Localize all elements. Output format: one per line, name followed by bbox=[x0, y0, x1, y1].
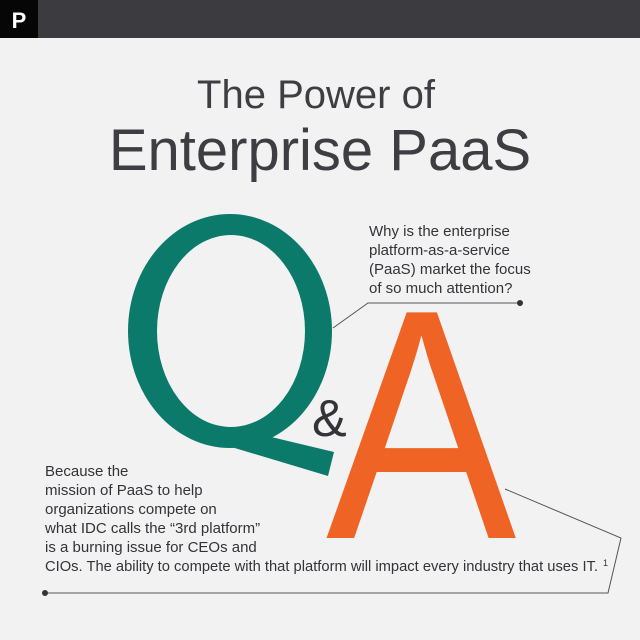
title: Enterprise PaaS bbox=[109, 118, 531, 183]
letter Q bbox=[128, 214, 334, 476]
question text: platform-as-a-service bbox=[369, 242, 510, 259]
title bbox=[109, 73, 531, 183]
answer text: 1 bbox=[603, 558, 608, 568]
answer text: is a burning issue for CEOs and bbox=[45, 539, 257, 556]
answer text: Because the bbox=[45, 463, 128, 480]
answer text: organizations compete on bbox=[45, 501, 217, 518]
title: The Power of bbox=[197, 73, 436, 117]
question text bbox=[369, 223, 531, 297]
answer text: mission of PaaS to help bbox=[45, 482, 203, 499]
answer text bbox=[44, 463, 608, 575]
question text: of so much attention? bbox=[369, 280, 512, 297]
answer text: what IDC calls the “3rd platform” bbox=[44, 520, 260, 537]
logo: P bbox=[12, 8, 26, 33]
question text: (PaaS) market the focus bbox=[369, 261, 531, 278]
ampersand: & bbox=[312, 390, 347, 448]
question text: Why is the enterprise bbox=[369, 223, 510, 240]
letter A: A bbox=[326, 242, 518, 608]
answer callout line bbox=[42, 489, 621, 596]
logo bbox=[0, 0, 38, 38]
top bar bbox=[0, 0, 640, 38]
answer text: CIOs. The ability to compete with that platform will impact every industry that uses IT. bbox=[45, 558, 598, 575]
question callout line bbox=[333, 300, 523, 328]
